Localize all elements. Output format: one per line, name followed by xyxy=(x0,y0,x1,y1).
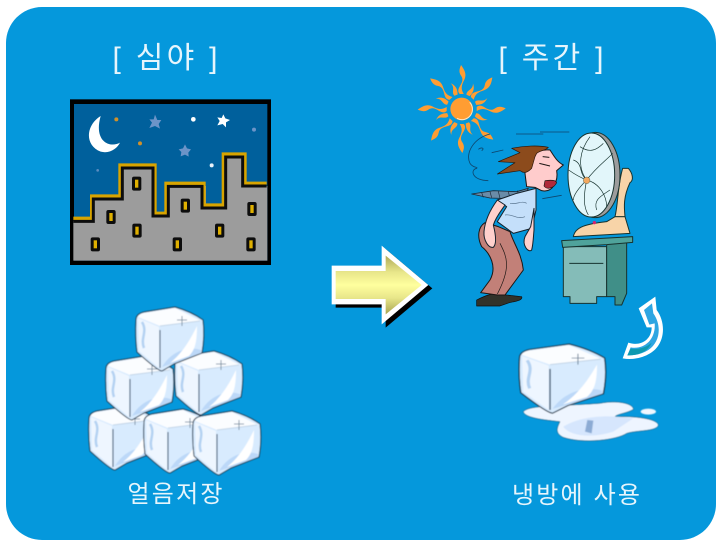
puddle xyxy=(523,402,658,441)
shirt xyxy=(497,188,536,233)
arms xyxy=(484,200,505,247)
icon: stacked ice cubes xyxy=(89,307,261,475)
cube xyxy=(519,344,606,413)
hair xyxy=(497,146,548,174)
icon: sun xyxy=(418,65,506,153)
icon: man cooling in front of fan xyxy=(469,132,633,306)
heading: daytime: [ 주간 ] xyxy=(498,42,604,75)
icon: curved arrow xyxy=(623,297,663,359)
arrow: night to day xyxy=(332,246,432,328)
tie xyxy=(472,188,528,199)
icon: melting ice cube xyxy=(519,344,658,441)
icon: night city scene xyxy=(70,99,271,265)
label: ice storage: 얼음저장 xyxy=(128,481,222,508)
shoes xyxy=(477,294,522,306)
trousers xyxy=(479,223,523,295)
cabinet and fan base xyxy=(562,132,633,305)
label: used for cooling: 냉방에 사용 xyxy=(512,482,640,509)
wind lines xyxy=(469,132,569,199)
heading: night: [ 심야 ] xyxy=(112,42,218,75)
head xyxy=(525,150,563,191)
